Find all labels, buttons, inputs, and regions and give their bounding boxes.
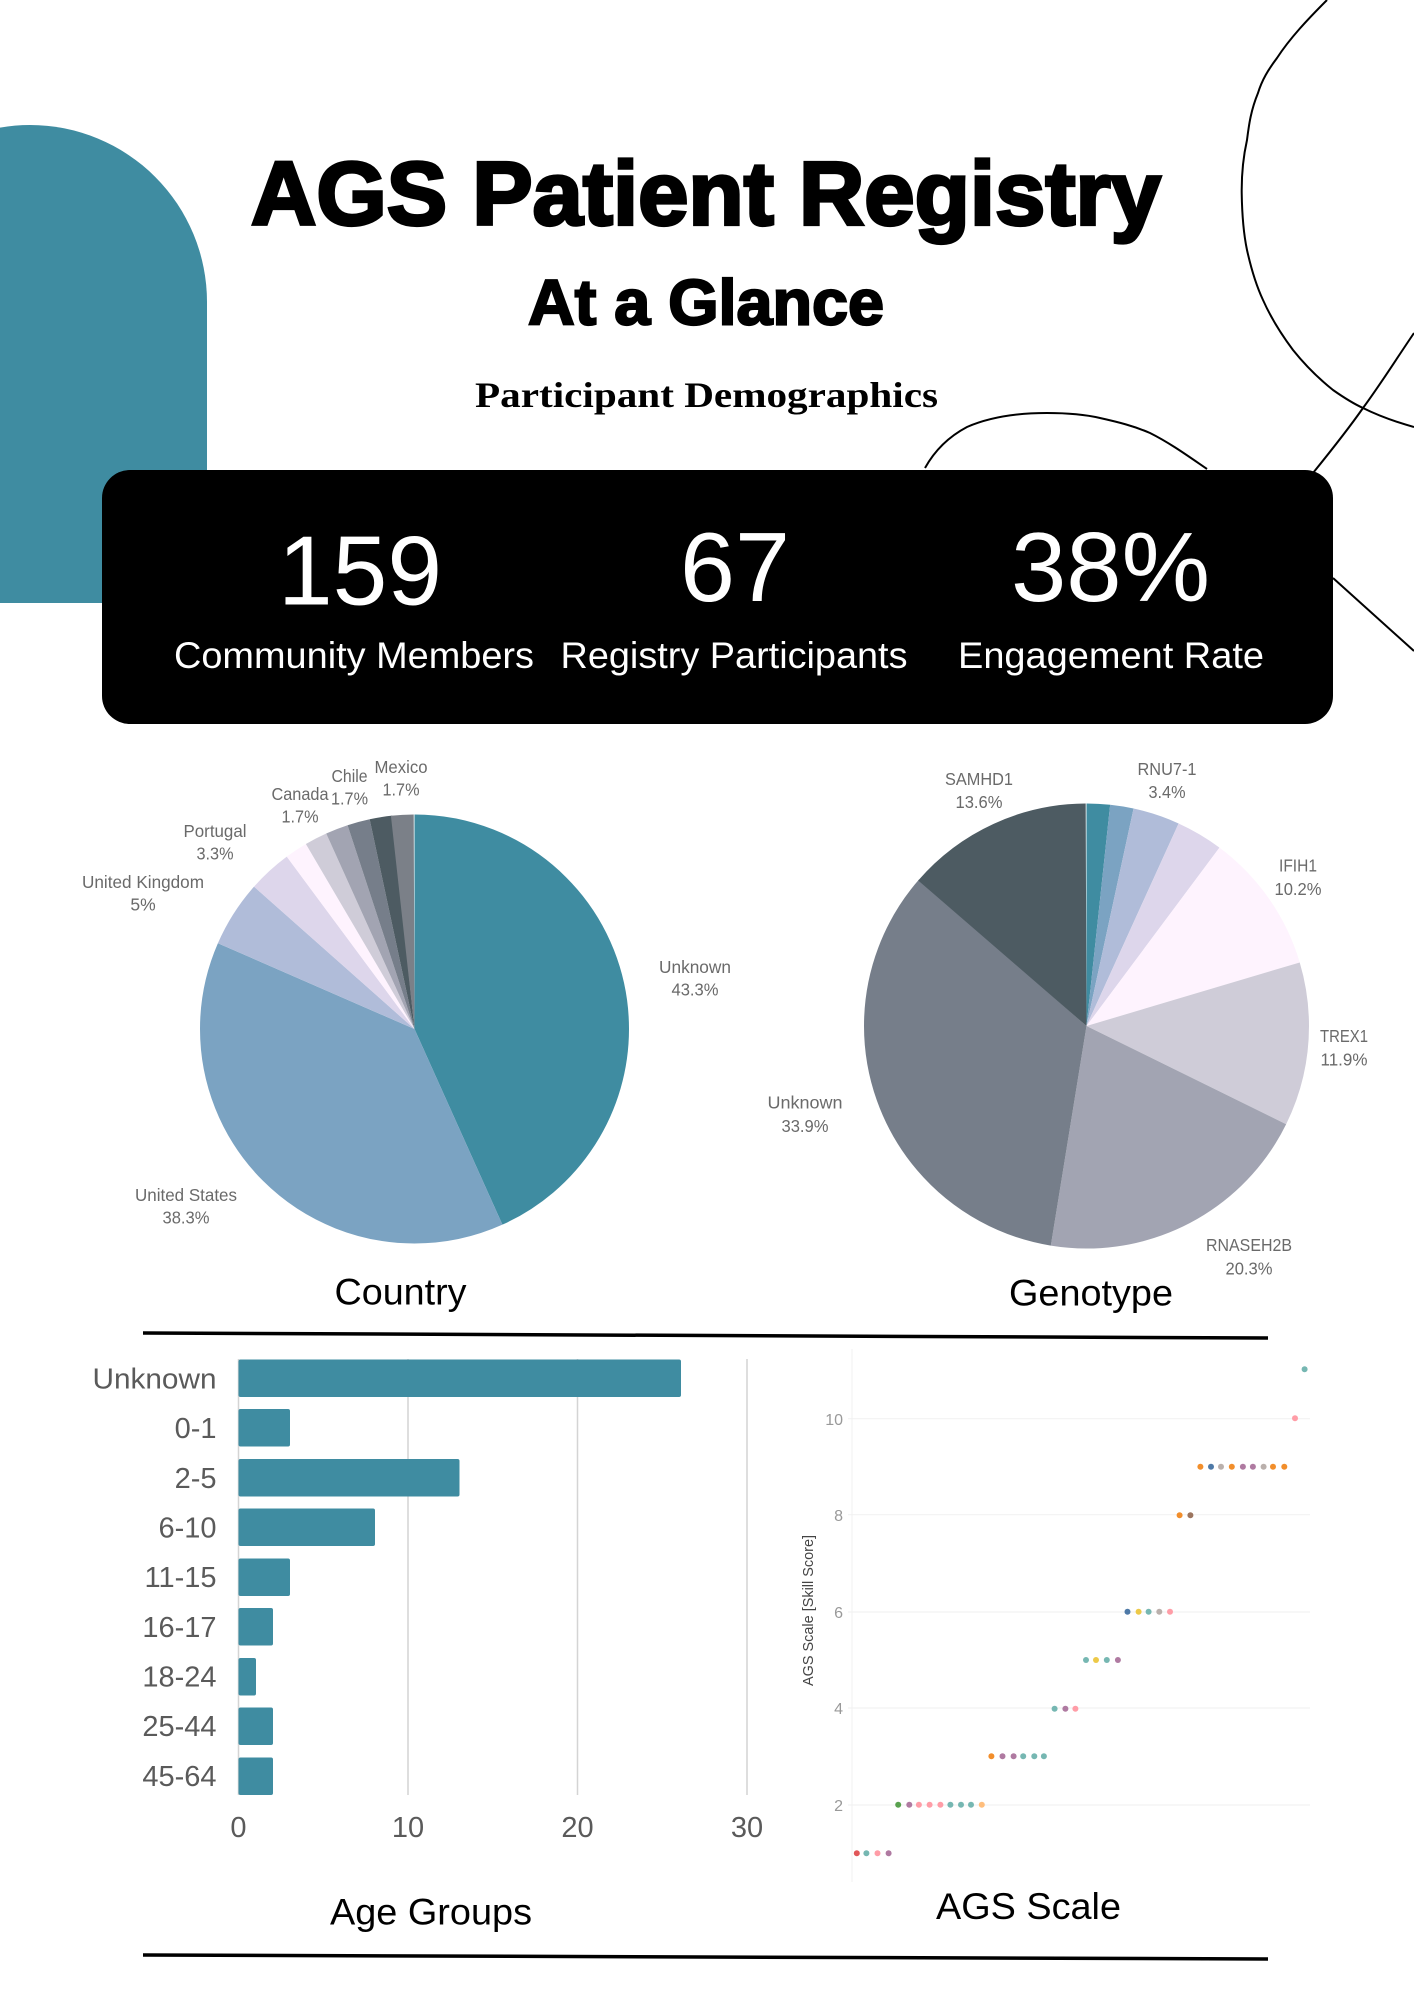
stat: engagement rate bbox=[958, 512, 1264, 676]
age labels: 11-15 bbox=[144, 1562, 216, 1594]
pie labels: genotype: RNU7-1 bbox=[1138, 759, 1196, 779]
stat: engagement rate: Engagement Rate bbox=[958, 635, 1264, 676]
scatter chart: AGS scale bbox=[800, 1349, 1310, 1927]
pie labels: genotype: 3.4% bbox=[1148, 782, 1186, 802]
pie slices bbox=[307, 922, 522, 1136]
decorative teal arch bbox=[0, 125, 207, 603]
caption: country: Country bbox=[334, 1272, 467, 1312]
pie labels: country: United Kingdom bbox=[82, 872, 204, 892]
y axis labels: 8 bbox=[834, 1508, 843, 1525]
pie labels: genotype: 20.3% bbox=[1226, 1258, 1272, 1278]
y axis labels: 2 bbox=[834, 1798, 843, 1815]
y axis labels: 6 bbox=[834, 1605, 843, 1622]
x axis labels bbox=[230, 1812, 763, 1844]
pie labels: country: United States bbox=[135, 1185, 237, 1205]
pie labels: genotype bbox=[768, 759, 1368, 1278]
divider line two bbox=[143, 1955, 1268, 1959]
pie labels: genotype: TREX1 bbox=[1320, 1026, 1368, 1046]
age labels bbox=[92, 1364, 216, 1793]
age labels: 2-5 bbox=[175, 1463, 216, 1495]
x axis labels: 10 bbox=[392, 1812, 424, 1844]
pie labels: genotype: 33.9% bbox=[782, 1116, 828, 1136]
x axis labels: 0 bbox=[230, 1812, 247, 1844]
pie labels: genotype: IFIH1 bbox=[1279, 856, 1317, 876]
section heading: Participant Demographics bbox=[475, 375, 938, 415]
pie chart: genotype bbox=[768, 759, 1368, 1314]
pie labels: country: Canada bbox=[272, 784, 329, 804]
x axis labels: 30 bbox=[731, 1812, 763, 1844]
pie slices bbox=[975, 915, 1198, 1137]
stat: community members: Community Members bbox=[174, 635, 534, 676]
decorative curved outlines bbox=[925, 0, 1414, 651]
pie labels: genotype: RNASEH2B bbox=[1206, 1235, 1292, 1255]
stat: registry participants: Registry Participants bbox=[560, 635, 908, 676]
pie labels: country: Portugal bbox=[184, 821, 246, 841]
title: AGS Patient Registry bbox=[251, 144, 1161, 244]
grid lines bbox=[238, 1359, 747, 1795]
caption: genotype: Genotype bbox=[1009, 1272, 1173, 1314]
pie chart: country bbox=[82, 757, 731, 1312]
pie labels: country: 1.7% bbox=[331, 788, 368, 808]
pie labels: genotype: 11.9% bbox=[1320, 1050, 1368, 1070]
age labels: 0-1 bbox=[175, 1413, 216, 1445]
pie labels: country: 38.3% bbox=[162, 1208, 210, 1228]
pie labels: country: 1.7% bbox=[282, 806, 318, 826]
pie labels: genotype: 13.6% bbox=[956, 792, 1002, 812]
bars bbox=[238, 1360, 681, 1795]
y axis title: AGS Scale [Skill Score] bbox=[800, 1535, 817, 1686]
stats background bbox=[102, 470, 1333, 724]
age labels: 25-44 bbox=[142, 1711, 216, 1743]
pie labels: genotype: 10.2% bbox=[1274, 879, 1322, 899]
stat: engagement rate: 38% bbox=[1011, 512, 1210, 622]
age labels: 16-17 bbox=[142, 1612, 216, 1644]
y axis labels bbox=[825, 1412, 843, 1815]
stat: community members bbox=[174, 516, 534, 676]
stat: community members: 159 bbox=[278, 516, 442, 626]
pie labels: genotype: Unknown bbox=[768, 1092, 842, 1112]
divider line one bbox=[143, 1333, 1268, 1338]
pie labels: country: Unknown bbox=[659, 957, 731, 977]
subtitle: At a Glance bbox=[528, 266, 884, 338]
stat: registry participants bbox=[560, 512, 908, 676]
caption: age groups: Age Groups bbox=[330, 1892, 532, 1932]
data points bbox=[854, 1366, 1308, 1856]
age labels: Unknown bbox=[92, 1364, 216, 1396]
y axis labels: 10 bbox=[825, 1412, 843, 1429]
pie labels: country: 3.3% bbox=[196, 844, 234, 864]
y axis labels: 4 bbox=[834, 1701, 843, 1718]
stat: registry participants: 67 bbox=[680, 512, 790, 622]
grid lines bbox=[848, 1349, 1310, 1882]
pie labels: country bbox=[82, 757, 731, 1228]
age labels: 18-24 bbox=[142, 1662, 216, 1694]
pie labels: country: Mexico bbox=[374, 757, 428, 777]
age labels: 45-64 bbox=[142, 1761, 216, 1793]
pie labels: country: Chile bbox=[332, 766, 368, 786]
panel: key statistics bbox=[102, 470, 1333, 724]
pie labels: country: 43.3% bbox=[672, 980, 718, 1000]
bar chart: age groups bbox=[92, 1359, 763, 1932]
pie labels: genotype: SAMHD1 bbox=[945, 769, 1013, 789]
pie labels: country: 5% bbox=[130, 894, 156, 914]
x axis labels: 20 bbox=[561, 1812, 594, 1844]
caption: AGS scale: AGS Scale bbox=[936, 1886, 1121, 1927]
pie labels: country: 1.7% bbox=[382, 780, 420, 800]
age labels: 6-10 bbox=[158, 1512, 216, 1544]
